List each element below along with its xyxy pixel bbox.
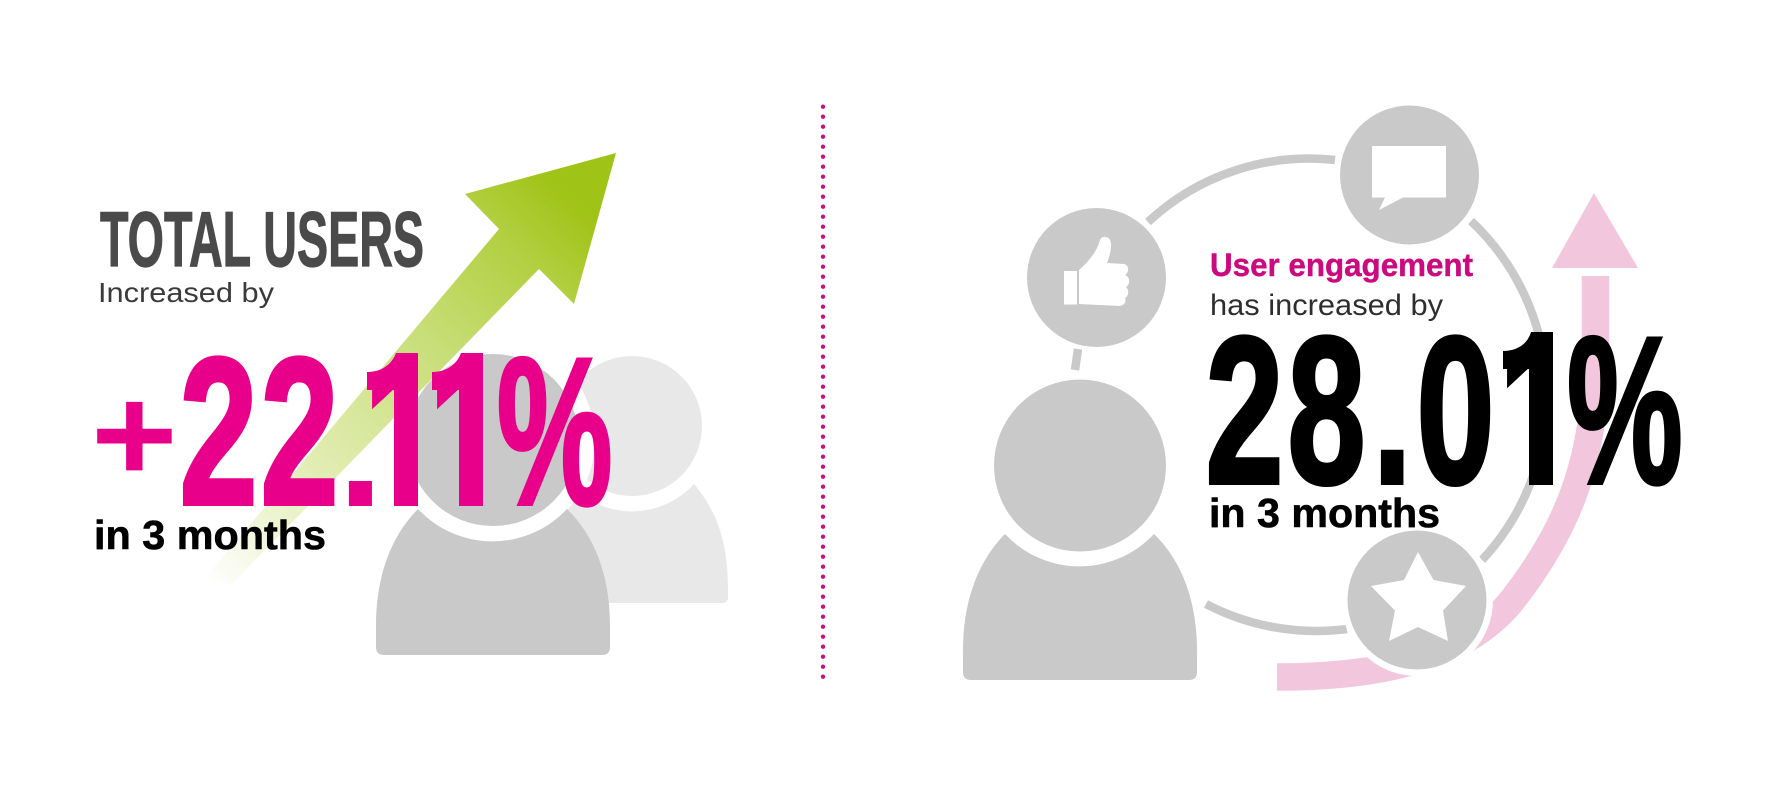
stat: +22.11%: + bbox=[91, 360, 178, 510]
panel: total users bbox=[91, 153, 728, 655]
heading: total users: TOTAL USERS bbox=[100, 195, 424, 283]
icon: back user bbox=[536, 356, 728, 603]
icon: pink growth arrow bbox=[1277, 193, 1638, 677]
icon: thumbs up circle bbox=[1027, 208, 1166, 347]
text: in 3 months: in 3 months bbox=[94, 512, 326, 558]
icon: comment circle bbox=[1340, 106, 1479, 244]
stat: +22.11% bbox=[97, 353, 610, 508]
icon: user bbox=[963, 380, 1197, 680]
icon: star circle bbox=[1341, 524, 1493, 676]
icon: front user bbox=[376, 354, 610, 655]
text: in 3 months: in 3 months bbox=[1209, 490, 1440, 536]
text: has increased by: has increased by bbox=[1210, 289, 1443, 322]
heading: user engagement: User engagement bbox=[1210, 247, 1473, 283]
icon: engagement ring bbox=[1075, 159, 1547, 631]
stat: 28.01% bbox=[1208, 332, 1681, 487]
stat: +22.11%: 22.11 bbox=[179, 314, 507, 549]
stat: +22.11%: % bbox=[497, 315, 613, 550]
icon: growth arrow bbox=[205, 153, 616, 584]
panel: user engagement bbox=[963, 106, 1683, 680]
stat: 28.01%: 28.01 bbox=[1205, 293, 1577, 528]
divider bbox=[821, 107, 825, 683]
stat: 28.01%: % bbox=[1567, 294, 1683, 529]
text: increased by: Increased by bbox=[98, 277, 274, 308]
